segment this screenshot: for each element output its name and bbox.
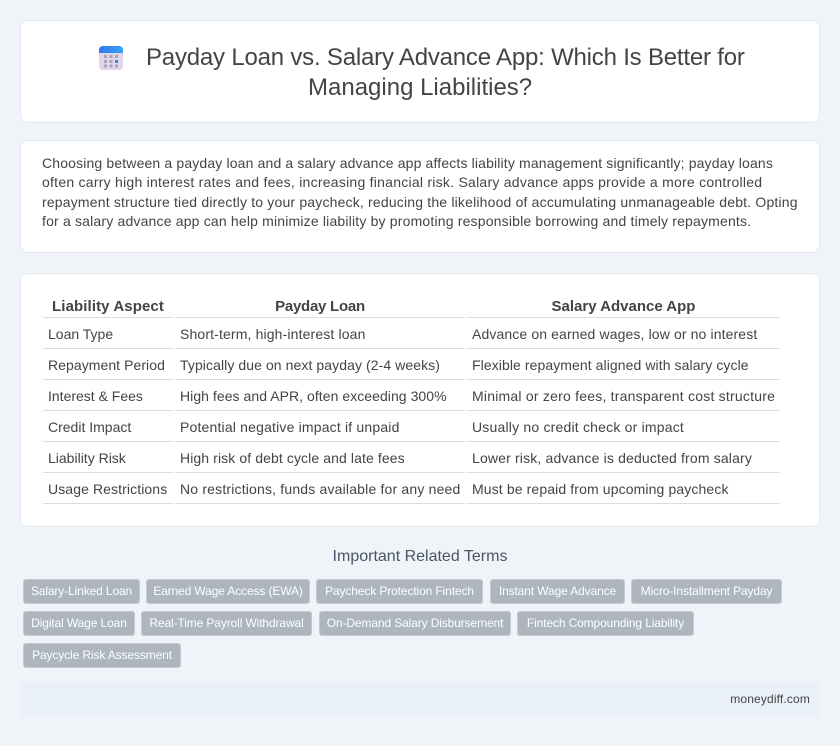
table row: Interest & Fees: Minimal or zero fees, transparent cost structure	[472, 388, 775, 404]
tag group: related terms: Real-Time Payroll Withdrawal	[149, 616, 304, 630]
tag group: related terms	[23, 579, 782, 668]
table row: Repayment Period: Repayment Period	[48, 357, 165, 373]
table header: Payday Loan	[275, 298, 365, 315]
table row: Usage Restrictions: No restrictions, funds available for any need	[180, 481, 460, 497]
table row: Credit Impact: Usually no credit check or impact	[472, 419, 684, 435]
icon: calendar	[99, 46, 123, 70]
table row: Usage Restrictions: Usage Restrictions	[48, 481, 167, 497]
tag group: related terms: Paycheck Protection Fintech	[325, 584, 474, 598]
table row: Repayment Period: Flexible repayment aligned with salary cycle	[472, 357, 749, 373]
panel: title header	[20, 20, 820, 123]
heading: related terms: Important Related Terms	[333, 548, 507, 565]
table row: Loan Type: Loan Type	[48, 326, 113, 342]
table header: Liability Aspect	[52, 298, 164, 315]
table row: Credit Impact: Potential negative impact if unpaid	[180, 419, 400, 435]
table row: Interest & Fees	[43, 388, 780, 411]
table row: Interest & Fees: High fees and APR, often exceeding 300%	[180, 388, 447, 404]
table row: Liability Risk	[43, 450, 780, 473]
text: summary	[42, 154, 798, 229]
title: Payday Loan vs. Salary Advance App: Which Is Better for	[146, 44, 745, 71]
table row: Credit Impact: Credit Impact	[48, 419, 131, 435]
text: summary: repayment structure tied directly to your paycheck, reducing the likelihood of accumulating unmanageable debt. Opting	[42, 194, 798, 210]
tag group: related terms: Fintech Compounding Liability	[527, 616, 684, 630]
table row: Repayment Period: Typically due on next payday (2-4 weeks)	[180, 357, 440, 373]
panel: summary paragraph	[20, 140, 820, 253]
footer bar	[20, 682, 820, 716]
tag group: related terms: Salary-Linked Loan	[31, 584, 132, 598]
title: Managing Liabilities?	[308, 74, 532, 101]
table header: Salary Advance App	[552, 298, 695, 315]
table row: Loan Type: Advance on earned wages, low or no interest	[472, 326, 757, 342]
table row: Loan Type	[43, 326, 780, 349]
tag group: related terms: Paycycle Risk Assessment	[32, 648, 172, 662]
table row: Loan Type: Short-term, high-interest loan	[180, 326, 366, 342]
text: summary: Choosing between a payday loan and a salary advance app affects liability management significantly; payday loans	[42, 154, 773, 170]
table header	[43, 298, 780, 318]
table row: Usage Restrictions	[43, 481, 780, 504]
table row: Liability Risk: High risk of debt cycle and late fees	[180, 450, 405, 466]
title	[146, 44, 745, 101]
table row: Liability Risk: Liability Risk	[48, 450, 126, 466]
tag group: related terms: On-Demand Salary Disbursement	[327, 616, 503, 630]
tag group: related terms: Micro-Installment Payday	[641, 584, 772, 598]
table row: Interest & Fees: Interest & Fees	[48, 388, 143, 404]
table row: Credit Impact	[43, 419, 780, 442]
table row: Usage Restrictions: Must be repaid from upcoming paycheck	[472, 481, 729, 497]
table row: Repayment Period	[43, 357, 780, 380]
text: summary: for a salary advance app can help minimize liability by promoting responsible borrowing and timely repayments.	[42, 213, 751, 229]
tag group: related terms: Instant Wage Advance	[499, 584, 616, 598]
footer: site name: moneydiff.com	[730, 692, 810, 706]
panel: comparison table	[20, 273, 820, 527]
text: summary: often carry high interest rates and fees, increasing financial risk. Salary advance apps provide a more controlled	[42, 174, 762, 190]
tag group: related terms: Digital Wage Loan	[31, 616, 127, 630]
table row: Liability Risk: Lower risk, advance is deducted from salary	[472, 450, 752, 466]
tag group: related terms: Earned Wage Access (EWA)	[153, 584, 303, 598]
